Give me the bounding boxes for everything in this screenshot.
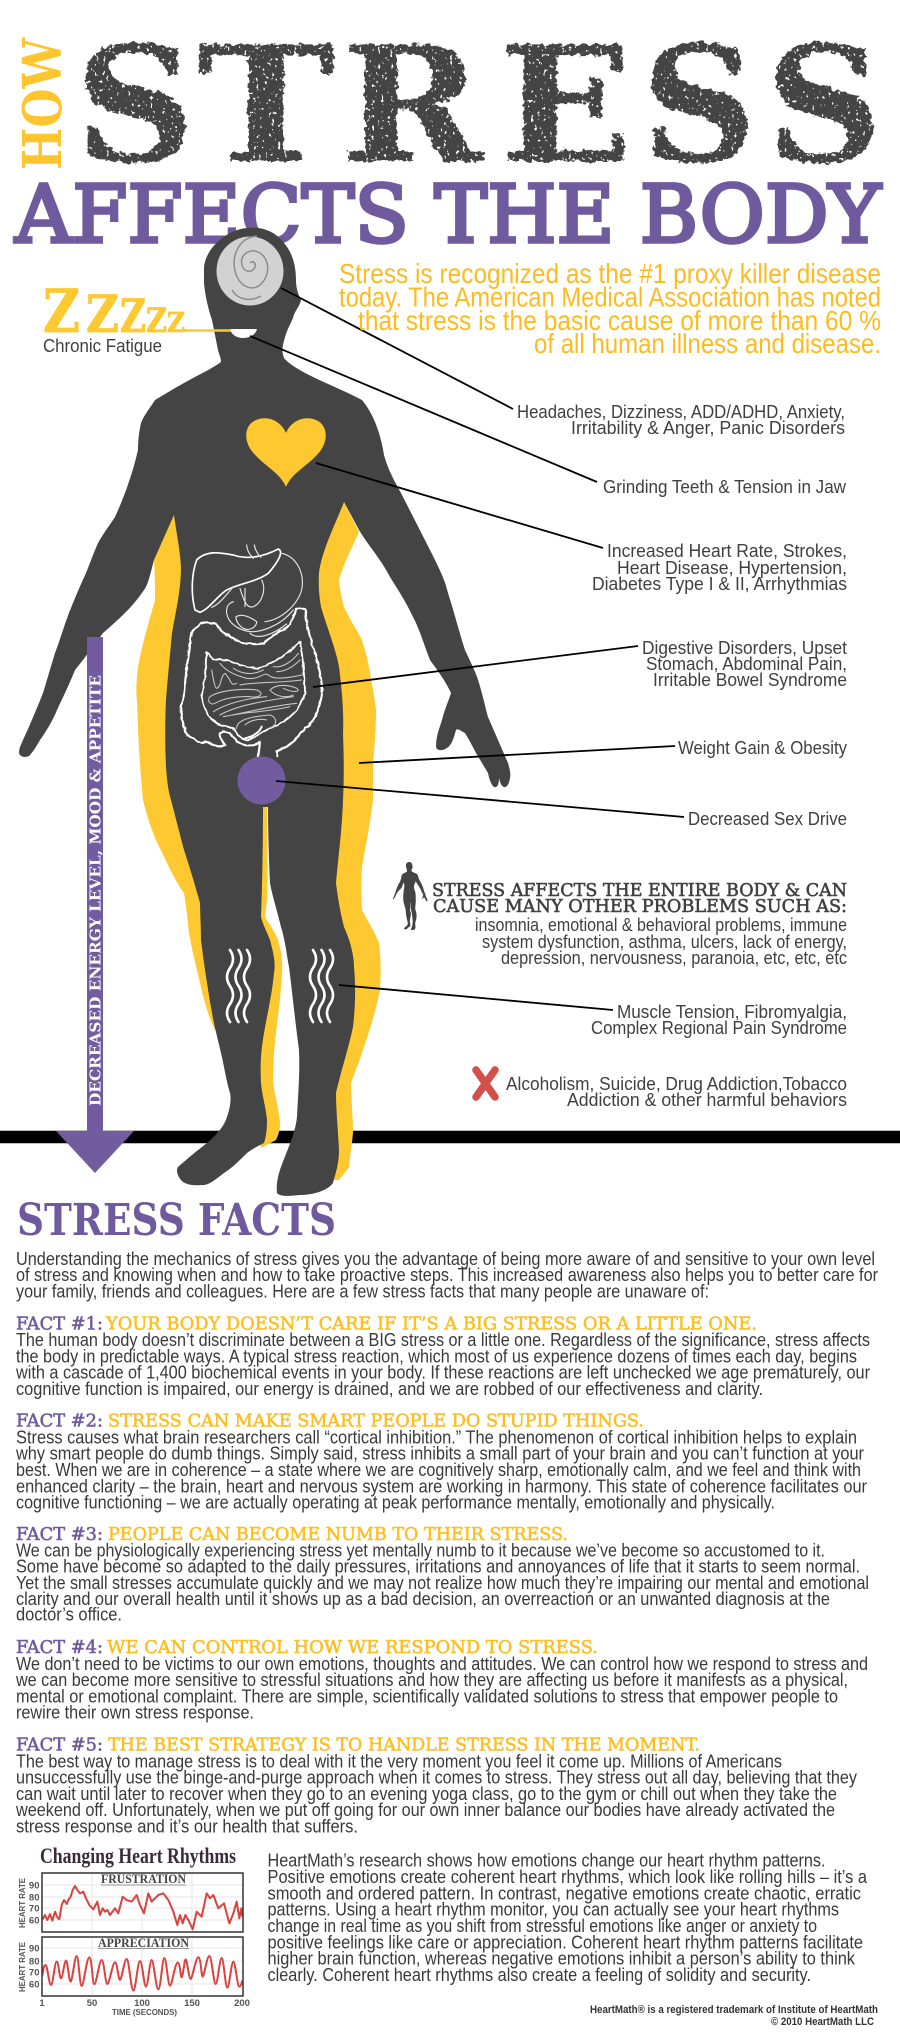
label: muscle: Complex Regional Pain Syndrome <box>591 1017 847 1038</box>
symptom labels <box>517 401 848 1038</box>
label: digestive: Irritable Bowel Syndrome <box>653 669 847 690</box>
connector to jaw <box>172 329 231 332</box>
icon: Zzzzz: Z <box>120 289 146 343</box>
axis labels: 150 <box>184 1998 200 2009</box>
large intestine <box>181 608 322 757</box>
label: heart <box>592 540 847 594</box>
callout heading <box>432 881 847 917</box>
axis labels: 1 <box>39 1998 45 2009</box>
fact 5 text: stress response and it’s our health that suffers. <box>16 1815 358 1836</box>
icon: heart <box>246 418 326 487</box>
fact 3 text <box>16 1540 869 1625</box>
label: Chronic Fatigue <box>43 335 162 356</box>
fact 5 heading: FACT #5: <box>16 1736 103 1756</box>
intro paragraph <box>16 1248 878 1301</box>
axis labels: 90 <box>29 1880 40 1892</box>
dark silhouette <box>19 228 510 1196</box>
label: headaches: Headaches, Dizziness, ADD/ADHD, Anxiety, <box>517 401 845 422</box>
title: STRESS: R <box>341 11 484 199</box>
icon: Zzzzz: Z <box>43 277 80 347</box>
fact 1 heading: YOUR BODY DOESN’T CARE IF IT’S A BIG STRESS OR A LITTLE ONE. <box>105 1314 757 1334</box>
label: muscle <box>591 1001 847 1038</box>
axis labels: 70 <box>29 1904 40 1914</box>
fact 1 text: cognitive function is impaired, our energy is drained, and we are robbed of our effectiveness and clarity. <box>16 1378 763 1399</box>
title: STRESS: S <box>75 11 195 199</box>
callout text: insomnia, emotional & behavioral problems, immune <box>475 914 847 935</box>
panel: frustration: FRUSTRATION <box>101 1872 186 1886</box>
callout text <box>475 914 847 968</box>
callout text: depression, nervousness, paranoia, etc, etc, etc <box>501 947 847 968</box>
intestines <box>181 608 322 757</box>
label: sex drive: Decreased Sex Drive <box>688 808 847 829</box>
fact 4 text <box>15 1653 868 1723</box>
axis labels: 70 <box>29 1968 40 1978</box>
label: headaches: Irritability & Anger, Panic Disorders <box>571 417 845 438</box>
label: digestive <box>642 637 847 690</box>
arrow label: DECREASED ENERGY LEVEL, MOOD & APPETITE <box>88 675 104 1106</box>
title: STRESS: E <box>499 11 633 199</box>
axis labels: 80 <box>29 1956 40 1968</box>
leader lines <box>250 288 684 1010</box>
callout: entire body <box>432 881 847 968</box>
icon: Zzzzz: Z <box>167 308 185 339</box>
label: muscle: Muscle Tension, Fibromyalgia, <box>617 1001 847 1022</box>
label: headaches <box>517 401 845 438</box>
callout heading: CAUSE MANY OTHER PROBLEMS SUCH AS: <box>433 897 847 917</box>
label: weight: Weight Gain & Obesity <box>678 737 848 758</box>
panel: frustration <box>42 1872 243 1932</box>
title: STRESS: T <box>197 11 335 199</box>
organ: bladder <box>238 756 286 804</box>
fact 3 text: doctor’s office. <box>16 1604 122 1625</box>
fact 2 text: cognitive functioning – we are actually operating at peak performance mentally, emotionally and physically. <box>16 1492 775 1513</box>
label: heart: Heart Disease, Hypertension, <box>617 557 847 578</box>
fact 4 text: rewire their own stress response. <box>16 1702 254 1723</box>
heartmath paragraph: change in real time as you shift from stressful emotions like anger or anxiety to <box>268 1915 817 1936</box>
label: harmful behaviors: Alcoholism, Suicide, Drug Addiction,Tobacco <box>506 1073 847 1094</box>
label: heart: Increased Heart Rate, Strokes, <box>607 540 847 561</box>
axis labels: 100 <box>134 1998 150 2009</box>
arrow: decreased energy <box>56 637 134 1173</box>
fact 2 text <box>15 1426 867 1513</box>
fact 3 heading: PEOPLE CAN BECOME NUMB TO THEIR STRESS. <box>108 1525 568 1545</box>
axis labels: 50 <box>87 1998 97 2009</box>
liver and stomach <box>192 545 302 636</box>
fact 5 heading: THE BEST STRATEGY IS TO HANDLE STRESS IN THE MOMENT. <box>108 1736 700 1756</box>
fact 5 text: The best way to manage stress is to deal with it the very moment you feel it come up. Millions of Americans <box>16 1750 782 1771</box>
icon: muscle tension waves left <box>227 950 250 1022</box>
intro paragraph: your family, friends and colleagues. Here are a few stress facts that many people are unaware of: <box>16 1280 709 1301</box>
fact 4 heading: WE CAN CONTROL HOW WE RESPOND TO STRESS. <box>107 1638 598 1658</box>
yellow weight-gain outline <box>136 502 381 1180</box>
panel: appreciation <box>42 1936 243 1996</box>
fact 4 heading: FACT #4: <box>16 1638 103 1658</box>
small intestine border <box>202 642 305 740</box>
axis labels <box>17 1878 250 2017</box>
axis labels: HEART RATE <box>17 1942 27 1992</box>
fact 2 heading: FACT #2: <box>16 1412 103 1432</box>
heartmath paragraph: HeartMath’s research shows how emotions change our heart rhythm patterns. <box>268 1850 826 1871</box>
fact 5 <box>15 1736 858 1836</box>
chart: changing heart rhythms <box>17 1843 250 2017</box>
rectum highlight <box>245 727 262 738</box>
title: STRESS: S <box>642 11 756 199</box>
heading: stress facts: STRESS FACTS <box>17 1195 336 1246</box>
icon: red X <box>476 1070 495 1097</box>
callout heading: STRESS AFFECTS THE ENTIRE BODY & CAN <box>432 881 847 901</box>
footer credit <box>590 2004 878 2028</box>
title: AFFECTS THE BODY: AFFECTS THE BODY <box>14 168 882 261</box>
icon: digestive organs <box>181 545 322 757</box>
fact 1 text <box>15 1329 870 1399</box>
label: harmful behaviors <box>506 1073 847 1110</box>
heartmath paragraph: patterns. Using a heart rhythm monitor, you can actually see your heart rhythms <box>268 1899 839 1920</box>
fact 3 heading: FACT #3: <box>16 1525 103 1545</box>
axis labels: TIME (SECONDS) <box>112 2007 177 2017</box>
icon: brain spiral <box>216 236 284 306</box>
icon: Zzzzz <box>43 277 185 347</box>
chart title: Changing Heart Rhythms <box>40 1843 236 1868</box>
callout text: system dysfunction, asthma, ulcers, lack of energy, <box>482 931 847 952</box>
title: STRESS <box>75 11 882 199</box>
label: digestive: Digestive Disorders, Upset <box>642 637 847 658</box>
body figure <box>19 228 510 1196</box>
icon: muscle tension waves right <box>310 950 333 1022</box>
footer credit: © 2010 HeartMath LLC <box>771 2016 874 2028</box>
chronic fatigue <box>43 277 231 356</box>
intro statement <box>339 258 881 359</box>
fact 1 <box>15 1314 870 1399</box>
fact 5 text <box>15 1750 858 1836</box>
fact 3 <box>16 1525 869 1625</box>
heartmath paragraph: clearly. Coherent heart rhythms also create a feeling of solidity and security. <box>268 1964 811 1985</box>
axis labels: 200 <box>234 1998 250 2009</box>
small intestine folds <box>209 653 302 728</box>
icon: grinding teeth jaw <box>230 329 257 338</box>
label: harmful behaviors: Addiction & other harmful behaviors <box>567 1089 847 1110</box>
heartmath paragraph <box>268 1850 868 1985</box>
fact 2 heading: STRESS CAN MAKE SMART PEOPLE DO STUPID THINGS. <box>108 1412 644 1432</box>
title: STRESS: S <box>766 11 882 199</box>
icon: Zzzzz: Z <box>86 285 119 345</box>
fact 4 <box>15 1638 868 1723</box>
black ground band <box>0 1130 900 1144</box>
axis labels: 60 <box>29 1916 40 1926</box>
label: digestive: Stomach, Abdominal Pain, <box>646 653 847 674</box>
label: heart: Diabetes Type I & II, Arrhythmias <box>592 573 847 594</box>
fact 1 heading: FACT #1: <box>16 1314 103 1334</box>
fact 2 <box>15 1412 867 1513</box>
axis labels: 80 <box>29 1892 40 1904</box>
title: HOW: HOW <box>12 37 74 170</box>
icon: small person <box>393 862 427 930</box>
axis labels: 60 <box>29 1980 40 1990</box>
panel: appreciation: APPRECIATION <box>98 1936 189 1950</box>
axis labels: 90 <box>29 1944 40 1954</box>
icon: Zzzzz: Z <box>146 301 167 341</box>
axis labels: HEART RATE <box>17 1878 27 1928</box>
label: grinding teeth: Grinding Teeth & Tension in Jaw <box>603 476 847 497</box>
